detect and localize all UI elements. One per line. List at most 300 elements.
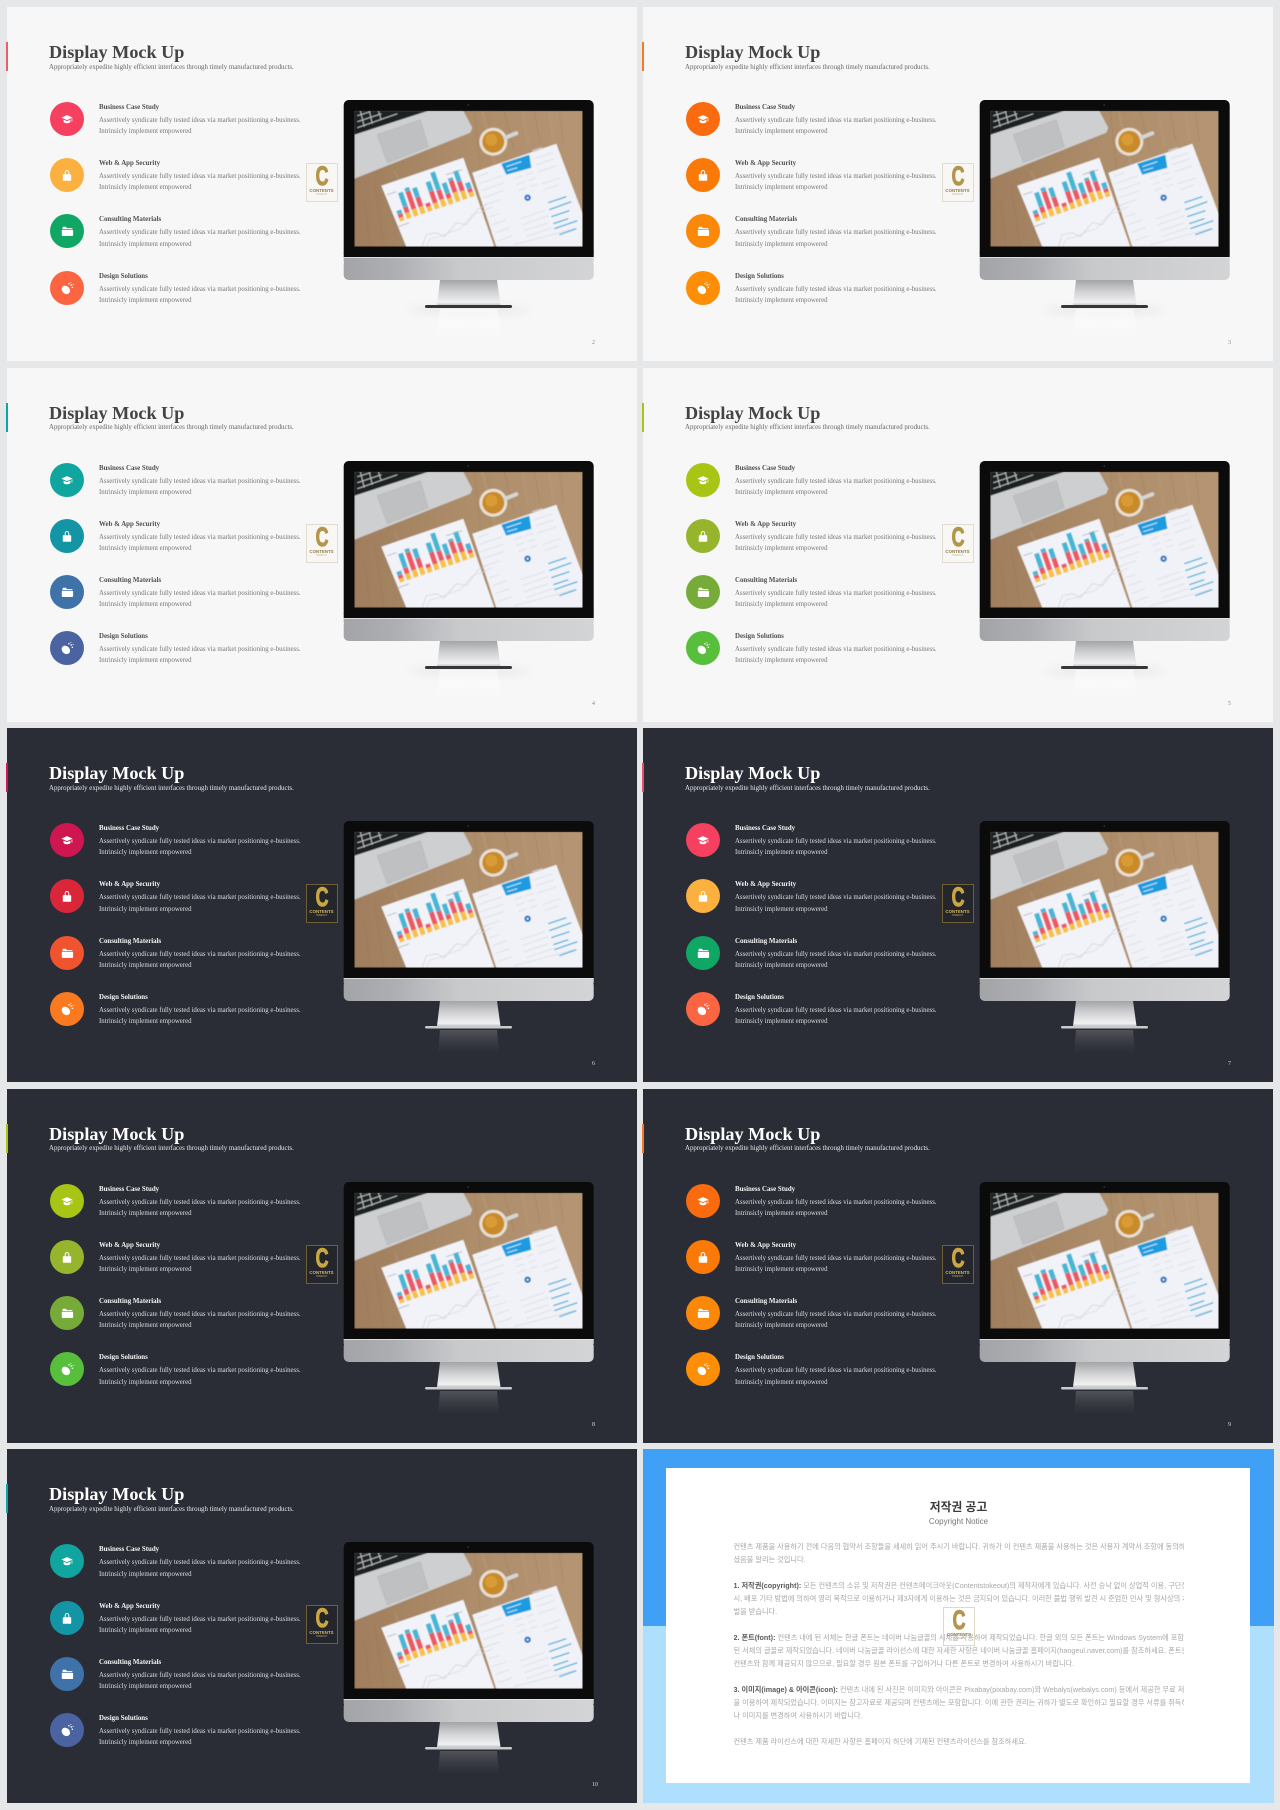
item text: Intrinsicly implement empowered [99, 297, 192, 304]
item text [735, 286, 937, 304]
monitor mockup [344, 100, 594, 312]
logo [306, 524, 338, 563]
accent bar [6, 1124, 8, 1153]
item heading: Consulting Materials [99, 216, 161, 223]
logo [943, 1607, 975, 1646]
item heading: Design Solutions [735, 994, 784, 1001]
item text [99, 1253, 301, 1275]
page number: 4 [592, 701, 595, 707]
item heading: Web & App Security [735, 1242, 796, 1249]
item text: Intrinsicly implement empowered [99, 1571, 192, 1578]
item heading: Web & App Security [99, 521, 160, 528]
item heading: Web & App Security [735, 881, 796, 888]
item text: Assertively syndicate fully tested ideas via market positioning e-business. [735, 117, 937, 124]
item text: Intrinsicly implement empowered [735, 962, 828, 969]
icon: folder [50, 1657, 84, 1691]
page number: 10 [592, 1782, 598, 1788]
item text: Intrinsicly implement empowered [735, 1018, 828, 1025]
notice body: 나 이미지를 변경하여 사용하시기 바랍니다. [734, 1711, 863, 1720]
item: design solutions [50, 271, 301, 305]
item text: Intrinsicly implement empowered [735, 1379, 828, 1386]
logo: TOKEOUT [316, 914, 327, 917]
item text: Assertively syndicate fully tested ideas via market positioning e-business. [99, 1672, 301, 1679]
icon: lock [686, 1240, 720, 1274]
item text [99, 1365, 301, 1388]
notice body [734, 1540, 1184, 1748]
icon: folder [686, 1296, 720, 1330]
notice title: 저작권 공고 [930, 1500, 987, 1514]
accent bar [642, 1124, 644, 1153]
panel: slide 2 light red [7, 7, 636, 361]
item text [99, 1726, 301, 1748]
item: business case study [686, 102, 937, 136]
item text [99, 172, 301, 191]
title: Display Mock Up [49, 403, 184, 423]
item heading: Business Case Study [735, 825, 795, 832]
item heading: Business Case Study [99, 1546, 159, 1553]
item text: Assertively syndicate fully tested ideas via market positioning e-business. [735, 590, 937, 597]
accent bar [642, 403, 644, 432]
monitor mockup [980, 100, 1230, 312]
panel: slide 9 dark orange [643, 1089, 1272, 1443]
item text: Assertively syndicate fully tested ideas via market positioning e-business. [735, 478, 937, 485]
item: business case study [686, 463, 937, 497]
logo: CONTENTS [945, 1270, 970, 1275]
item text: Intrinsicly implement empowered [99, 1210, 192, 1217]
item text [735, 836, 937, 859]
monitor mockup [307, 1529, 637, 1803]
icon: mouse [686, 271, 720, 305]
item: design solutions [50, 1352, 312, 1386]
item text: Assertively syndicate fully tested ideas via market positioning e-business. [99, 1367, 301, 1374]
item text: Assertively syndicate fully tested ideas via market positioning e-business. [99, 951, 301, 958]
item heading: Design Solutions [99, 1715, 148, 1722]
panel: slide 6 dark crimson [7, 728, 636, 1082]
item text [99, 1197, 301, 1219]
subtitle: Appropriately expedite highly efficient interfaces through timely manufactured products. [685, 424, 930, 431]
item text [735, 534, 937, 552]
item text [735, 590, 937, 608]
item heading: Design Solutions [99, 273, 148, 280]
accent bar [642, 763, 644, 792]
item text [99, 1309, 301, 1332]
page number: 8 [592, 1422, 595, 1428]
item: business case study [50, 823, 301, 857]
item text: Assertively syndicate fully tested ideas via market positioning e-business. [99, 286, 301, 293]
subtitle: Appropriately expedite highly efficient interfaces through timely manufactured products. [685, 1145, 930, 1152]
item heading: Web & App Security [99, 1242, 160, 1249]
logo: TOKEOUT [952, 914, 963, 917]
logo: TOKEOUT [952, 554, 963, 557]
item text: Assertively syndicate fully tested ideas via market positioning e-business. [99, 1311, 301, 1318]
item text: Intrinsicly implement empowered [99, 1683, 192, 1690]
logo: CONTENTS [309, 188, 334, 193]
item text [99, 1670, 301, 1692]
item heading: Consulting Materials [99, 938, 161, 945]
item text [735, 949, 937, 971]
panel: copyright notice [643, 1449, 1274, 1803]
icon: mouse [50, 271, 84, 305]
icon: folder [686, 214, 720, 248]
title: Display Mock Up [685, 403, 820, 423]
monitor mockup [943, 1169, 1273, 1443]
item text: Intrinsicly implement empowered [99, 241, 192, 248]
item text [99, 646, 301, 664]
icon: folder [686, 936, 720, 970]
item text [99, 1557, 301, 1580]
item text: Assertively syndicate fully tested ideas via market positioning e-business. [735, 173, 937, 180]
item text: Assertively syndicate fully tested ideas via market positioning e-business. [99, 229, 301, 236]
logo: TOKEOUT [952, 1275, 963, 1278]
item text: Intrinsicly implement empowered [99, 1379, 192, 1386]
icon: graduation cap [686, 463, 720, 497]
icon: graduation cap [686, 1184, 720, 1218]
item text [735, 1005, 937, 1027]
item text [99, 894, 301, 913]
item heading: Business Case Study [735, 465, 795, 472]
title: Display Mock Up [49, 42, 184, 62]
item heading: Business Case Study [99, 104, 159, 111]
icon: lock [686, 879, 720, 913]
item heading: Design Solutions [99, 1354, 148, 1361]
icon: folder [50, 1296, 84, 1330]
item text [99, 1005, 301, 1027]
icon: graduation cap [50, 1184, 84, 1218]
icon: lock [50, 879, 84, 913]
logo: CONTENTS [309, 549, 334, 554]
icon: lock [50, 1240, 84, 1274]
notice body: 컨텐츠와 함께 제공되지 않으므로, 필요할 경우 원본 폰트를 구입하거나 다른 폰트로 변경하여 사용하시기 바랍니다. [734, 1659, 1074, 1668]
logo: CONTENTS [947, 1632, 971, 1637]
monitor mockup [980, 461, 1230, 673]
item text: Intrinsicly implement empowered [99, 657, 192, 664]
icon: mouse [686, 1352, 720, 1386]
item heading: Web & App Security [735, 160, 796, 167]
item heading: Consulting Materials [735, 1298, 797, 1305]
item: consulting materials [50, 214, 301, 248]
title: Display Mock Up [685, 42, 820, 62]
logo: TOKEOUT [952, 193, 963, 196]
subtitle: Appropriately expedite highly efficient interfaces through timely manufactured products. [685, 785, 930, 792]
logo: CONTENTS [945, 909, 970, 914]
item text [99, 286, 301, 304]
item heading: Consulting Materials [735, 216, 797, 223]
item text: Assertively syndicate fully tested ideas via market positioning e-business. [735, 534, 937, 541]
item: design solutions [686, 1352, 948, 1386]
subtitle: Appropriately expedite highly efficient interfaces through timely manufactured products. [49, 785, 294, 792]
item: consulting materials [686, 575, 937, 609]
logo: CONTENTS [945, 549, 970, 554]
page number: 5 [1228, 701, 1231, 707]
item text: Assertively syndicate fully tested ideas via market positioning e-business. [99, 1616, 301, 1623]
item text [735, 1253, 937, 1275]
accent bar [642, 42, 644, 71]
icon: lock [686, 519, 720, 553]
title: Display Mock Up [685, 1124, 820, 1144]
item text: Intrinsicly implement empowered [735, 297, 828, 304]
icon: mouse [50, 992, 84, 1026]
item text: Intrinsicly implement empowered [99, 849, 192, 856]
item text [99, 116, 301, 135]
accent bar [6, 1484, 8, 1513]
item: business case study [686, 1184, 948, 1218]
item heading: Consulting Materials [99, 1659, 161, 1666]
item heading: Web & App Security [99, 1603, 160, 1610]
item text: Intrinsicly implement empowered [99, 128, 192, 135]
item text: Intrinsicly implement empowered [735, 1266, 828, 1273]
notice body: 시, 배포 기타 방법에 의하여 영리 목적으로 이용하거나 제3자에게 이용하는 것은 금지되어 있습니다. 이러한 불법 행위 발견 시 준엄한 민사 및 형사상의 처 [734, 1594, 1184, 1603]
item text: Intrinsicly implement empowered [735, 1322, 828, 1329]
item text: Intrinsicly implement empowered [99, 184, 192, 191]
item text: Intrinsicly implement empowered [735, 128, 828, 135]
accent bar [6, 42, 8, 71]
item heading: Design Solutions [735, 273, 784, 280]
title: Display Mock Up [49, 1124, 184, 1144]
notice body: 셨음을 알리는 것입니다. [734, 1555, 806, 1564]
item text: Intrinsicly implement empowered [99, 489, 192, 496]
logo: TOKEOUT [953, 1637, 965, 1640]
icon: folder [686, 575, 720, 609]
icon: mouse [50, 1352, 84, 1386]
item text: Assertively syndicate fully tested ideas via market positioning e-business. [99, 1199, 301, 1206]
item: consulting materials [50, 936, 312, 970]
item text [735, 116, 937, 135]
icon: graduation cap [686, 102, 720, 136]
white notice card [666, 1468, 1250, 1783]
item: business case study [50, 463, 301, 497]
item text: Assertively syndicate fully tested ideas via market positioning e-business. [99, 478, 301, 485]
item text: Intrinsicly implement empowered [99, 545, 192, 552]
title: Display Mock Up [49, 763, 184, 783]
panel: slide 3 light orange [643, 7, 1272, 361]
item text [99, 478, 301, 496]
page number: 3 [1228, 340, 1231, 346]
notice body: 컨텐츠 제품을 사용하기 전에 다음의 협약서 조항들을 세세히 읽어 주시기 바랍니다. 귀하가 이 컨텐츠 제품을 사용하는 것은 사용자 계약서 조항에 동의하 [734, 1542, 1184, 1551]
item text: Intrinsicly implement empowered [735, 241, 828, 248]
item heading: Business Case Study [99, 1186, 159, 1193]
icon: mouse [50, 1713, 84, 1747]
logo [306, 1245, 338, 1284]
panel: slide 7 dark red [643, 728, 1272, 1082]
monitor mockup [307, 808, 637, 1082]
item: design solutions [686, 271, 937, 305]
panel: slide 8 dark green [7, 1089, 636, 1443]
item text: Intrinsicly implement empowered [735, 1210, 828, 1217]
item heading: Business Case Study [735, 1186, 795, 1193]
item text: Assertively syndicate fully tested ideas via market positioning e-business. [735, 1367, 937, 1374]
notice body: 을 이용하여 제작되었습니다. 이미지는 참고자료로 제공되며 컨텐츠에는 포함합니다. 이에 관한 권리는 귀하가 별도로 확인하고 필요할 경우 서류를 취득하거 [734, 1698, 1184, 1707]
item: design solutions [686, 631, 937, 665]
notice body: 1. 저작권(copyright): 모든 컨텐츠의 소유 및 저작권은 컨텐츠메이크아웃(Contentstokeout)의 제작자에게 있습니다. 사전 승낙 없이 상업적 이용, 구단전 [734, 1581, 1184, 1590]
item text: Assertively syndicate fully tested ideas via market positioning e-business. [99, 1007, 301, 1014]
item text [735, 228, 937, 248]
item: web and app security [50, 1240, 312, 1274]
item text [735, 1309, 937, 1332]
item text: Intrinsicly implement empowered [99, 1018, 192, 1025]
item heading: Design Solutions [735, 633, 784, 640]
icon: folder [50, 936, 84, 970]
item text: Intrinsicly implement empowered [99, 1322, 192, 1329]
item text: Assertively syndicate fully tested ideas via market positioning e-business. [735, 1311, 937, 1318]
item text [735, 892, 937, 915]
item text: Assertively syndicate fully tested ideas via market positioning e-business. [99, 1728, 301, 1735]
item text [99, 228, 301, 248]
title: Display Mock Up [685, 763, 820, 783]
item: design solutions [50, 1713, 312, 1747]
item: consulting materials [686, 214, 937, 248]
item: web and app security [50, 1601, 312, 1635]
item text: Assertively syndicate fully tested ideas via market positioning e-business. [99, 894, 301, 901]
item heading: Business Case Study [99, 465, 159, 472]
item text: Assertively syndicate fully tested ideas via market positioning e-business. [735, 286, 937, 293]
item: consulting materials [50, 575, 301, 609]
item heading: Business Case Study [99, 825, 159, 832]
item: consulting materials [50, 1657, 312, 1691]
notice body: 벌을 받습니다. [734, 1607, 777, 1616]
item heading: Consulting Materials [735, 938, 797, 945]
item heading: Consulting Materials [735, 577, 797, 584]
logo: CONTENTS [945, 188, 970, 193]
item: consulting materials [50, 1296, 312, 1330]
item text [735, 646, 937, 664]
item text: Intrinsicly implement empowered [735, 489, 828, 496]
item text: Intrinsicly implement empowered [99, 906, 192, 913]
item text: Intrinsicly implement empowered [735, 184, 828, 191]
panel: slide 10 dark teal [7, 1449, 636, 1803]
item heading: Consulting Materials [99, 1298, 161, 1305]
logo [306, 884, 338, 923]
icon: mouse [686, 992, 720, 1026]
item: business case study [50, 102, 301, 136]
item text: Assertively syndicate fully tested ideas via market positioning e-business. [99, 646, 301, 653]
item text [99, 949, 301, 971]
item text: Assertively syndicate fully tested ideas via market positioning e-business. [735, 951, 937, 958]
notice subtitle: Copyright Notice [929, 1517, 988, 1526]
page number: 9 [1228, 1422, 1231, 1428]
icon: lock [50, 519, 84, 553]
subtitle: Appropriately expedite highly efficient interfaces through timely manufactured products. [49, 424, 294, 431]
logo: TOKEOUT [316, 1635, 327, 1638]
item text: Intrinsicly implement empowered [99, 1266, 192, 1273]
item text: Intrinsicly implement empowered [99, 601, 192, 608]
item: business case study [50, 1544, 312, 1578]
logo: TOKEOUT [316, 554, 327, 557]
item heading: Web & App Security [735, 521, 796, 528]
item text: Assertively syndicate fully tested ideas via market positioning e-business. [735, 1007, 937, 1014]
item: consulting materials [686, 1296, 948, 1330]
title: Display Mock Up [49, 1484, 184, 1504]
logo: TOKEOUT [316, 1275, 327, 1278]
item text: Assertively syndicate fully tested ideas via market positioning e-business. [735, 646, 937, 653]
item heading: Business Case Study [735, 104, 795, 111]
icon: graduation cap [686, 823, 720, 857]
item: consulting materials [686, 936, 948, 970]
item heading: Web & App Security [99, 881, 160, 888]
item text: Intrinsicly implement empowered [735, 906, 828, 913]
accent bar [6, 763, 8, 792]
monitor mockup [943, 808, 1273, 1082]
item: web and app security [686, 158, 937, 192]
monitor mockup [307, 1169, 637, 1443]
item text: Intrinsicly implement empowered [735, 545, 828, 552]
item text: Assertively syndicate fully tested ideas via market positioning e-business. [99, 838, 301, 845]
item: design solutions [50, 992, 312, 1026]
blue upper band [643, 1449, 1274, 1626]
item text [99, 590, 301, 608]
item text: Assertively syndicate fully tested ideas via market positioning e-business. [99, 534, 301, 541]
item: design solutions [686, 992, 948, 1026]
item text: Assertively syndicate fully tested ideas via market positioning e-business. [99, 1559, 301, 1566]
item text: Intrinsicly implement empowered [99, 1739, 192, 1746]
panel: slide 4 light teal [7, 368, 636, 722]
logo: CONTENTS [309, 909, 334, 914]
item text [735, 478, 937, 496]
icon: graduation cap [50, 463, 84, 497]
logo [942, 524, 974, 563]
item: web and app security [686, 519, 937, 553]
icon: mouse [50, 631, 84, 665]
accent bar [6, 403, 8, 432]
logo [942, 163, 974, 202]
item heading: Design Solutions [735, 1354, 784, 1361]
item text: Assertively syndicate fully tested ideas via market positioning e-business. [99, 1255, 301, 1262]
notice body: 2. 폰트(font): 컨텐츠 내에 된 서체는 한글 폰트는 네이버 나눔글꼴의 서체를 사용하여 제작되었습니다. 한글 외의 모든 폰트는 Windows System에 포함 [734, 1633, 1184, 1642]
item text: Intrinsicly implement empowered [735, 849, 828, 856]
subtitle: Appropriately expedite highly efficient interfaces through timely manufactured products. [685, 64, 930, 70]
item text: Intrinsicly implement empowered [99, 962, 192, 969]
item text [735, 1365, 937, 1388]
item text: Intrinsicly implement empowered [735, 657, 828, 664]
panel: slide 5 light green [643, 368, 1272, 722]
item text [99, 838, 301, 856]
subtitle: Appropriately expedite highly efficient interfaces through timely manufactured products. [49, 64, 294, 70]
logo [306, 1605, 338, 1644]
icon: graduation cap [50, 102, 84, 136]
item: web and app security [50, 879, 301, 913]
subtitle: Appropriately expedite highly efficient interfaces through timely manufactured products. [49, 1506, 294, 1513]
item text [99, 534, 301, 552]
page number: 2 [592, 340, 595, 346]
item text: Intrinsicly implement empowered [99, 1627, 192, 1634]
logo: TOKEOUT [316, 193, 327, 196]
item heading: Consulting Materials [99, 577, 161, 584]
icon: lock [50, 1601, 84, 1635]
item: web and app security [50, 519, 301, 553]
icon: mouse [686, 631, 720, 665]
item: business case study [50, 1184, 312, 1218]
logo [942, 884, 974, 923]
item text: Assertively syndicate fully tested ideas via market positioning e-business. [99, 590, 301, 597]
item: design solutions [50, 631, 301, 665]
item text [735, 1197, 937, 1219]
item text [99, 1614, 301, 1636]
item heading: Design Solutions [99, 633, 148, 640]
item: web and app security [686, 879, 948, 913]
item text: Assertively syndicate fully tested ideas via market positioning e-business. [99, 117, 301, 124]
item heading: Web & App Security [99, 160, 160, 167]
item text: Assertively syndicate fully tested ideas via market positioning e-business. [735, 838, 937, 845]
logo [942, 1245, 974, 1284]
icon: folder [50, 575, 84, 609]
logo: CONTENTS [309, 1630, 334, 1635]
item: web and app security [686, 1240, 948, 1274]
item text [735, 172, 937, 191]
item text: Intrinsicly implement empowered [735, 601, 828, 608]
notice body: 컨텐츠 제품 라이선스에 대한 자세한 사항은 홈페이지 하단에 기재된 컨텐츠라이선스를 참조하세요. [734, 1737, 1027, 1746]
item: web and app security [50, 158, 301, 192]
monitor mockup [344, 461, 594, 673]
icon: lock [50, 158, 84, 192]
